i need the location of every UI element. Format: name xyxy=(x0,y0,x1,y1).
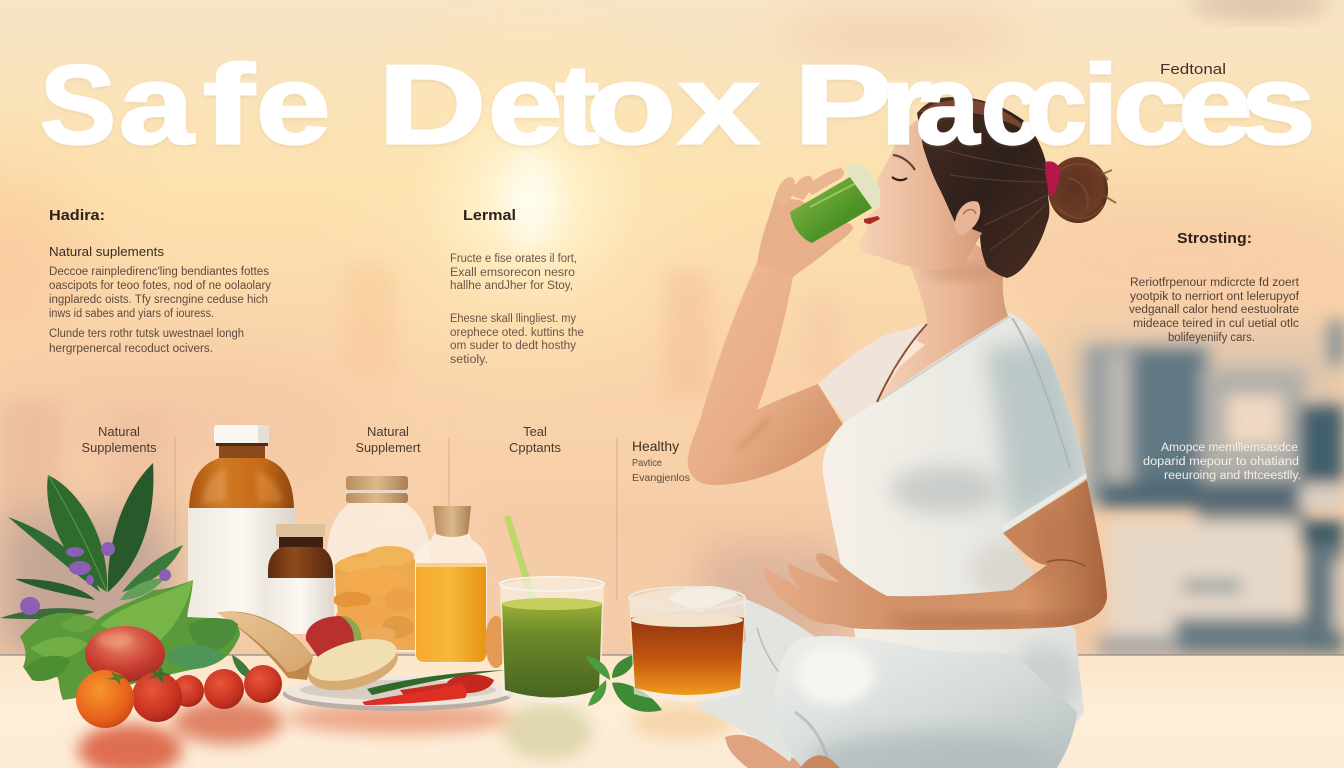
text block: center column: hallhe andJher for Stoy, xyxy=(450,280,573,292)
table reflections xyxy=(78,700,734,768)
title: c xyxy=(1113,43,1188,168)
title: P xyxy=(794,43,892,168)
title: t xyxy=(555,43,600,168)
text block: right lower note: reeuroing and thtceestlly. xyxy=(1164,470,1301,482)
mint sprig xyxy=(586,654,662,712)
text block: right lower note xyxy=(1143,442,1301,482)
title: a xyxy=(916,43,979,168)
text block: left column: oascipots for teoo fotes, nod of ne oolaolary xyxy=(49,280,271,292)
text block: center column: Exall emsorecon nesro xyxy=(450,267,575,279)
plant: fresh mint greens xyxy=(20,580,254,700)
title: o xyxy=(586,43,676,168)
oil bottle with cork xyxy=(415,506,487,663)
woman: magenta hair tie xyxy=(1045,161,1060,197)
title xyxy=(40,43,1316,168)
title: r xyxy=(880,43,932,168)
text block: right column: Strosting: xyxy=(1177,231,1252,247)
glass of amber tea xyxy=(629,586,746,702)
plant: long green leaves and purple flowers xyxy=(0,463,183,619)
text block: left column: Hadira: xyxy=(49,208,105,224)
title: c xyxy=(1026,43,1087,168)
text block: left column: hergrpenercal recoduct ocivers. xyxy=(49,343,213,355)
text block: right column: vedganall calor hend eestuolrate xyxy=(1129,304,1299,316)
text block: right lower note: doparid mepour to ohatiand xyxy=(1143,456,1299,468)
label: Natural Supplements: Natural xyxy=(98,424,140,439)
tomatoes xyxy=(76,665,282,728)
label: Natural Supplements: Supplements xyxy=(82,440,157,455)
title: i xyxy=(1082,43,1119,168)
text block: right column: bolifeyeniify cars. xyxy=(1168,332,1255,344)
woman: resting arm and hand xyxy=(763,480,1107,630)
glass of green juice xyxy=(500,577,604,704)
plate xyxy=(283,676,513,711)
title: S xyxy=(40,43,116,168)
woman: face xyxy=(859,120,982,270)
label: Teal Cpptants: Cpptants xyxy=(509,440,561,455)
text block: center column: Lermal xyxy=(463,208,516,224)
woman: lips xyxy=(864,216,880,224)
woman: raised arm xyxy=(688,263,845,485)
label: Healthy Pavtice Evangjenlos: Pavtice xyxy=(632,457,662,469)
woman: closed eye and brow xyxy=(892,155,915,180)
green juice bottle xyxy=(790,164,880,243)
woman: fingers on bottle xyxy=(775,168,844,208)
label: Healthy Pavtice Evangjenlos xyxy=(632,438,690,484)
text block: left column: Clunde ters rothr tutsk uwestnael longh xyxy=(49,328,244,340)
title: c xyxy=(981,43,1042,168)
woman: ear and earring xyxy=(952,201,980,240)
apple xyxy=(85,626,165,682)
straw xyxy=(504,515,537,602)
bread round slice xyxy=(303,631,403,699)
label: Healthy Pavtice Evangjenlos: Evangjenlos xyxy=(632,472,690,484)
text block: left column xyxy=(49,208,271,355)
text block: center column: orephece oted. kuttins the xyxy=(450,327,584,339)
title: e xyxy=(488,43,563,168)
text block: center column: setioly. xyxy=(450,354,488,366)
label: Natural Supplemert: Natural xyxy=(367,424,409,439)
woman: white t-shirt xyxy=(818,313,1087,724)
title: a xyxy=(119,43,194,168)
woman: front foot xyxy=(800,755,840,768)
glass jar with dried fruit xyxy=(327,476,430,652)
text block: right lower note: Amopce memlllemsasdce xyxy=(1161,442,1298,454)
label: Natural Supplements xyxy=(82,424,157,455)
woman: hair bun xyxy=(1048,157,1116,223)
table surface xyxy=(0,654,1344,768)
large amber bottle xyxy=(188,425,295,622)
label: Healthy Pavtice Evangjenlos: Healthy xyxy=(632,438,679,454)
title: x xyxy=(678,43,760,168)
heading: Fedtonal: Fedtonal xyxy=(1160,61,1226,78)
text block: left column: inws id sabes and yiars of iouress. xyxy=(49,308,214,320)
text block: left column: Deccoe rainpledirenc'ling bendiantes fottes xyxy=(49,266,269,278)
woman: hand holding bottle xyxy=(757,197,853,277)
green beans and red peppers xyxy=(362,670,507,705)
text block: right column: Reriotfrpenour mdicrcte fd zoert xyxy=(1130,277,1300,289)
label: Teal Cpptants xyxy=(509,424,561,455)
text block: center column: Fructe e fise orates il fort, xyxy=(450,253,577,265)
text block: center column xyxy=(450,208,584,366)
text block: right column xyxy=(1129,231,1300,344)
label: Natural Supplemert xyxy=(356,424,421,455)
woman: front leg xyxy=(778,636,1077,768)
text block: right column: mideace teired in cul uetial otlc xyxy=(1133,318,1299,330)
title: e xyxy=(256,43,331,168)
red fruit slice xyxy=(306,616,362,657)
title: f xyxy=(203,43,254,168)
orange citrus behind glass xyxy=(485,616,507,668)
label: Teal Cpptants: Teal xyxy=(523,424,547,439)
woman: back leg and foot xyxy=(698,598,830,768)
label: Natural Supplemert: Supplemert xyxy=(356,440,421,455)
large bread loaf xyxy=(217,612,313,680)
title: e xyxy=(1178,43,1253,168)
woman: hair behind xyxy=(917,97,1049,278)
text block: left column: ingplaredc oists. Tfy srecngine ceduse hich xyxy=(49,294,268,306)
title: s xyxy=(1241,43,1316,168)
text block: center column: om suder to dedt hosthy xyxy=(450,340,576,352)
small amber bottle xyxy=(267,524,334,634)
text block: left column: Natural suplements xyxy=(49,244,165,259)
title: D xyxy=(378,43,486,168)
text block: center column: Ehesne skall llingliest. my xyxy=(450,313,576,325)
background: blurred city skyline xyxy=(0,265,1344,655)
text block: right column: yootpik to nerriort ont lelerupyof xyxy=(1130,291,1300,303)
woman: neck xyxy=(877,235,1008,402)
